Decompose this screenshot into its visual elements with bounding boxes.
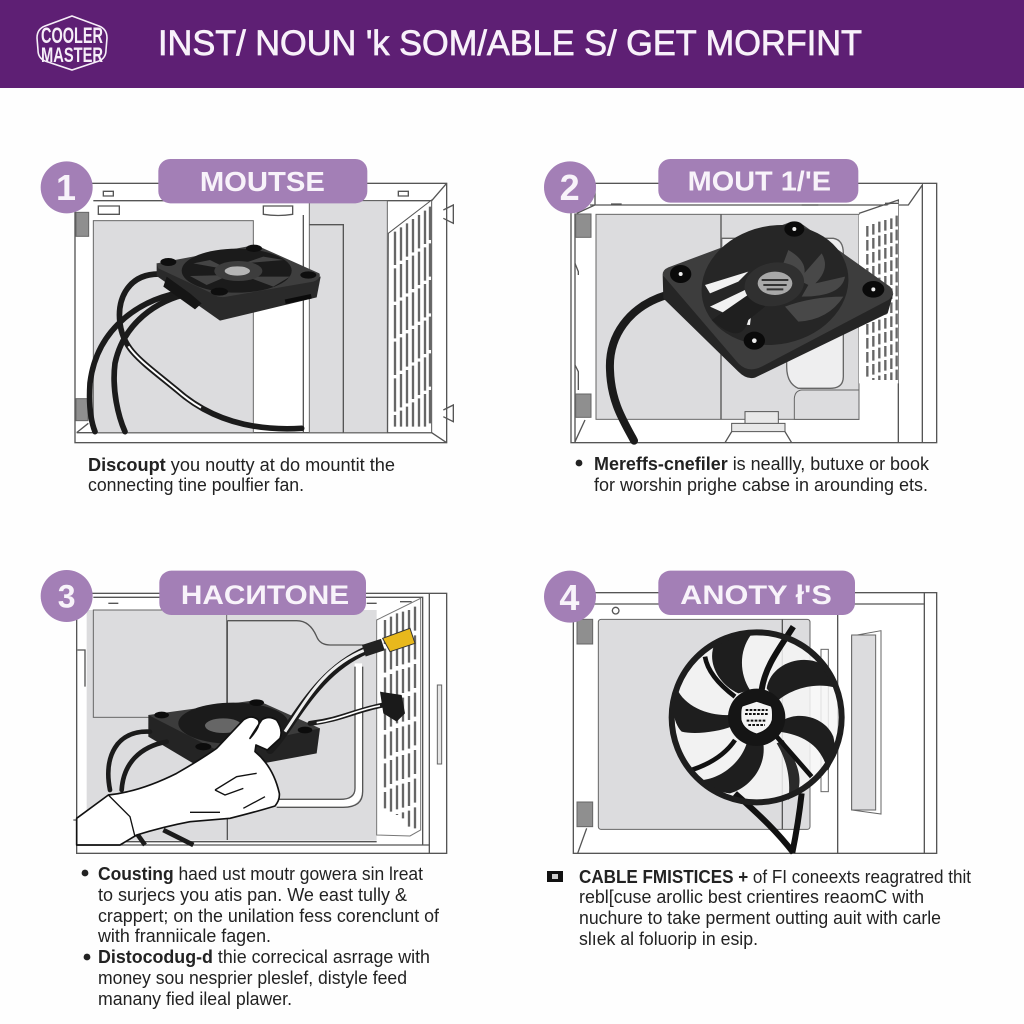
logo: Cooler Master badge: COOLER — [41, 23, 103, 48]
fan — [157, 245, 321, 321]
step 2 description — [576, 454, 930, 495]
step 4 description: rebl[cuse arollic best crientires reaomC with — [579, 887, 924, 907]
step heading: HACИTONE: HACИTONE — [181, 580, 349, 610]
step heading: ANOTY ł'S — [658, 571, 855, 615]
panel 2: mount — [544, 159, 937, 495]
fan — [148, 699, 320, 773]
panel 3: hand routing cables — [41, 570, 447, 1009]
step 3 description: Distocodug-d thie correcical asrrage with — [98, 947, 430, 967]
step 3 description: to surjecs you atis pan. We east tully & — [98, 885, 407, 905]
step heading: ANOTY ł'S: ANOTY ł'S — [680, 580, 832, 610]
title: INST/ NOUN 'k SOM/ABLE S/ GET MORFINT — [158, 24, 862, 63]
icon: cable tag — [547, 871, 563, 882]
step heading: MOUTSE: MOUTSE — [200, 166, 325, 197]
step heading: MOUT 1/'E: MOUT 1/'E — [688, 166, 831, 197]
step 3 description: with franniicale fagen. — [97, 926, 271, 946]
step 1 description: Discoupt you noutty at do mountit the — [88, 455, 395, 475]
step number 2 — [544, 161, 596, 213]
step 3 description: manany fied ileal plawer. — [98, 989, 292, 1009]
panel 4: large fan — [544, 571, 971, 949]
step number 1 — [41, 161, 93, 213]
step 4 description: CABLE FMISTICES + of FI coneexts reagratred thit — [579, 867, 971, 887]
logo: Cooler Master badge — [37, 16, 107, 70]
logo: Cooler Master badge: MASTER — [41, 44, 103, 67]
header banner — [0, 0, 1024, 88]
cables — [90, 274, 302, 432]
step 3 description: crappert; on the unilation fess corenclunt of — [98, 906, 440, 926]
step heading: HACИTONE — [159, 571, 366, 615]
cable — [610, 295, 667, 441]
step 4 description: slıek al foluorip in esip. — [579, 929, 758, 949]
panel 1: mouse — [41, 159, 453, 495]
fan — [663, 212, 893, 378]
case illustration 2 — [571, 183, 937, 443]
step 2 description: Mereffs-cnefiler is neallly, butuxe or book — [594, 454, 930, 474]
step number 4 — [544, 571, 596, 623]
step heading: MOUT 1/'E — [658, 159, 858, 203]
step number 1: 1 — [56, 167, 76, 208]
step 1 description — [88, 455, 395, 495]
case illustration 1 — [75, 183, 453, 443]
cables with connectors — [108, 628, 415, 845]
step 1 description: connecting tine poulfier fan. — [88, 475, 304, 495]
step 4 description: nuchure to take perment outting auit with carle — [579, 908, 941, 928]
step number 2: 2 — [560, 167, 580, 208]
case illustration 3 — [73, 593, 447, 853]
step 4 description — [547, 867, 971, 949]
step number 4: 4 — [559, 577, 579, 618]
large fan — [672, 627, 842, 853]
step 2 description: for worshin prighe cabse in arounding ets. — [594, 475, 928, 495]
step 3 description: Cousting haed ust moutr gowera sin lreat — [98, 864, 423, 884]
step heading: MOUTSE — [158, 159, 367, 203]
step number 3: 3 — [58, 578, 76, 614]
step 3 description: money sou nesprier pleslef, distyle feed — [98, 968, 407, 988]
case illustration 4 — [573, 593, 937, 853]
step 3 description — [82, 864, 440, 1009]
hand — [77, 717, 281, 845]
step number 3 — [41, 570, 93, 622]
